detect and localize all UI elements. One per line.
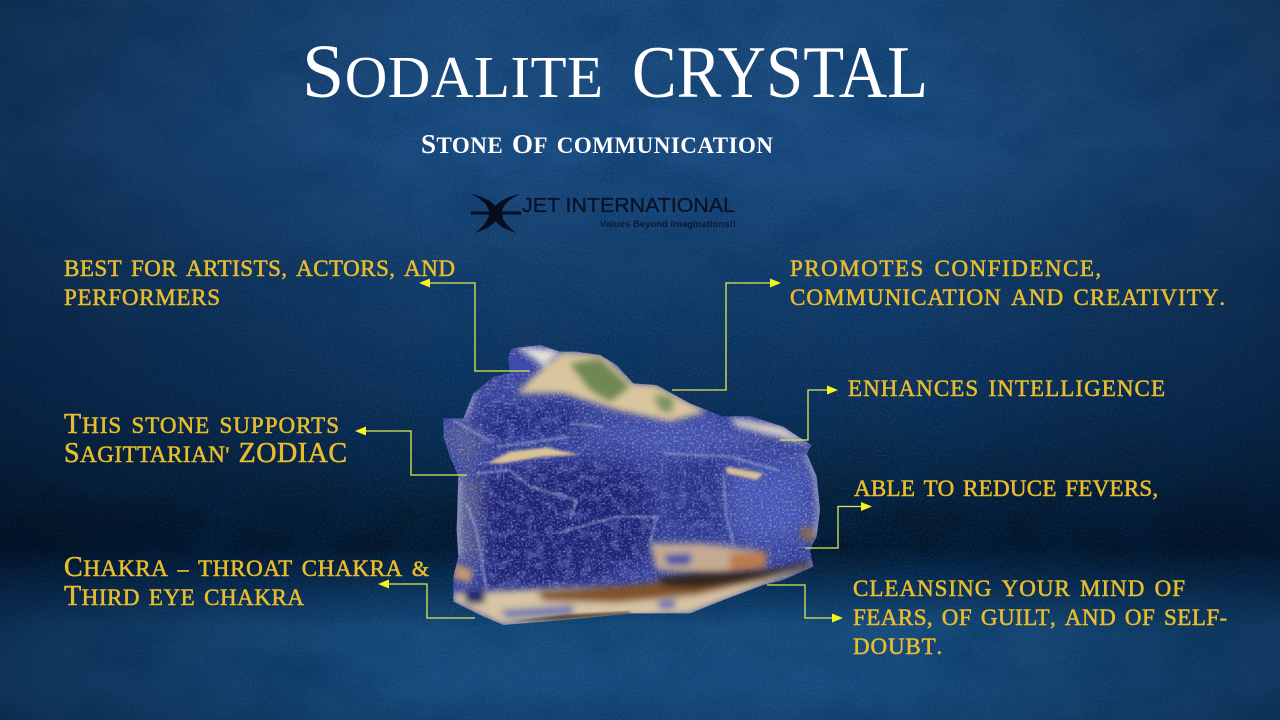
pale rock rim	[457, 393, 820, 557]
logo: Jet International	[471, 194, 736, 233]
text: chakra	[64, 548, 429, 613]
icon: pisces symbol	[471, 194, 521, 233]
arrow: artists	[419, 278, 530, 371]
text: fevers: able to reduce fevers,	[854, 468, 1158, 504]
text: cleansing: cleansing your mind of	[853, 568, 1185, 604]
text: zodiac: Sagittarian' ZODIAC	[64, 434, 347, 470]
text: artists: performers	[64, 277, 220, 313]
text: confidence: communication and creativity.	[790, 277, 1225, 313]
mottled texture	[444, 345, 818, 624]
text: zodiac	[64, 405, 347, 470]
text: intelligence: enhances intelligence	[848, 368, 1165, 404]
text: cleansing	[853, 568, 1227, 662]
subtitle: Stone Of communication	[421, 125, 773, 161]
green patches	[570, 358, 673, 413]
text: cleansing: doubt.	[853, 626, 942, 662]
arrow: chakra	[378, 580, 475, 618]
white veins	[453, 420, 777, 590]
tan bands	[487, 447, 763, 480]
arrow: fevers	[805, 502, 872, 548]
text: confidence	[790, 248, 1225, 313]
arrow: confidence	[672, 278, 781, 390]
logo name: JET INTERNATIONAL	[522, 195, 735, 217]
arrow: cleansing	[767, 585, 843, 622]
arrow: intelligence	[780, 386, 838, 440]
text: cleansing: fears, of guilt, and of self-	[853, 597, 1227, 633]
text: artists: best for artists, actors, and	[64, 248, 455, 284]
text: chakra: Chakra – throat chakra &	[64, 548, 429, 584]
text: zodiac: This stone supports	[64, 405, 339, 441]
blue lobe at top left	[507, 357, 535, 375]
sodalite stone	[443, 345, 820, 625]
arrow: zodiac	[355, 426, 467, 475]
text: chakra: Third eye chakra	[64, 577, 304, 613]
title: Sodalite	[302, 23, 603, 116]
connector arrows	[355, 278, 872, 622]
lower brown and cream band	[453, 562, 813, 625]
blue faces	[443, 400, 810, 590]
text: artists	[64, 248, 455, 313]
logo tagline: Values Beyond Imaginations!!	[600, 219, 736, 230]
title: CRYSTAL	[632, 32, 928, 114]
text: confidence: promotes confidence,	[790, 248, 1101, 284]
pale matrix at top	[515, 347, 812, 445]
title	[302, 23, 928, 116]
